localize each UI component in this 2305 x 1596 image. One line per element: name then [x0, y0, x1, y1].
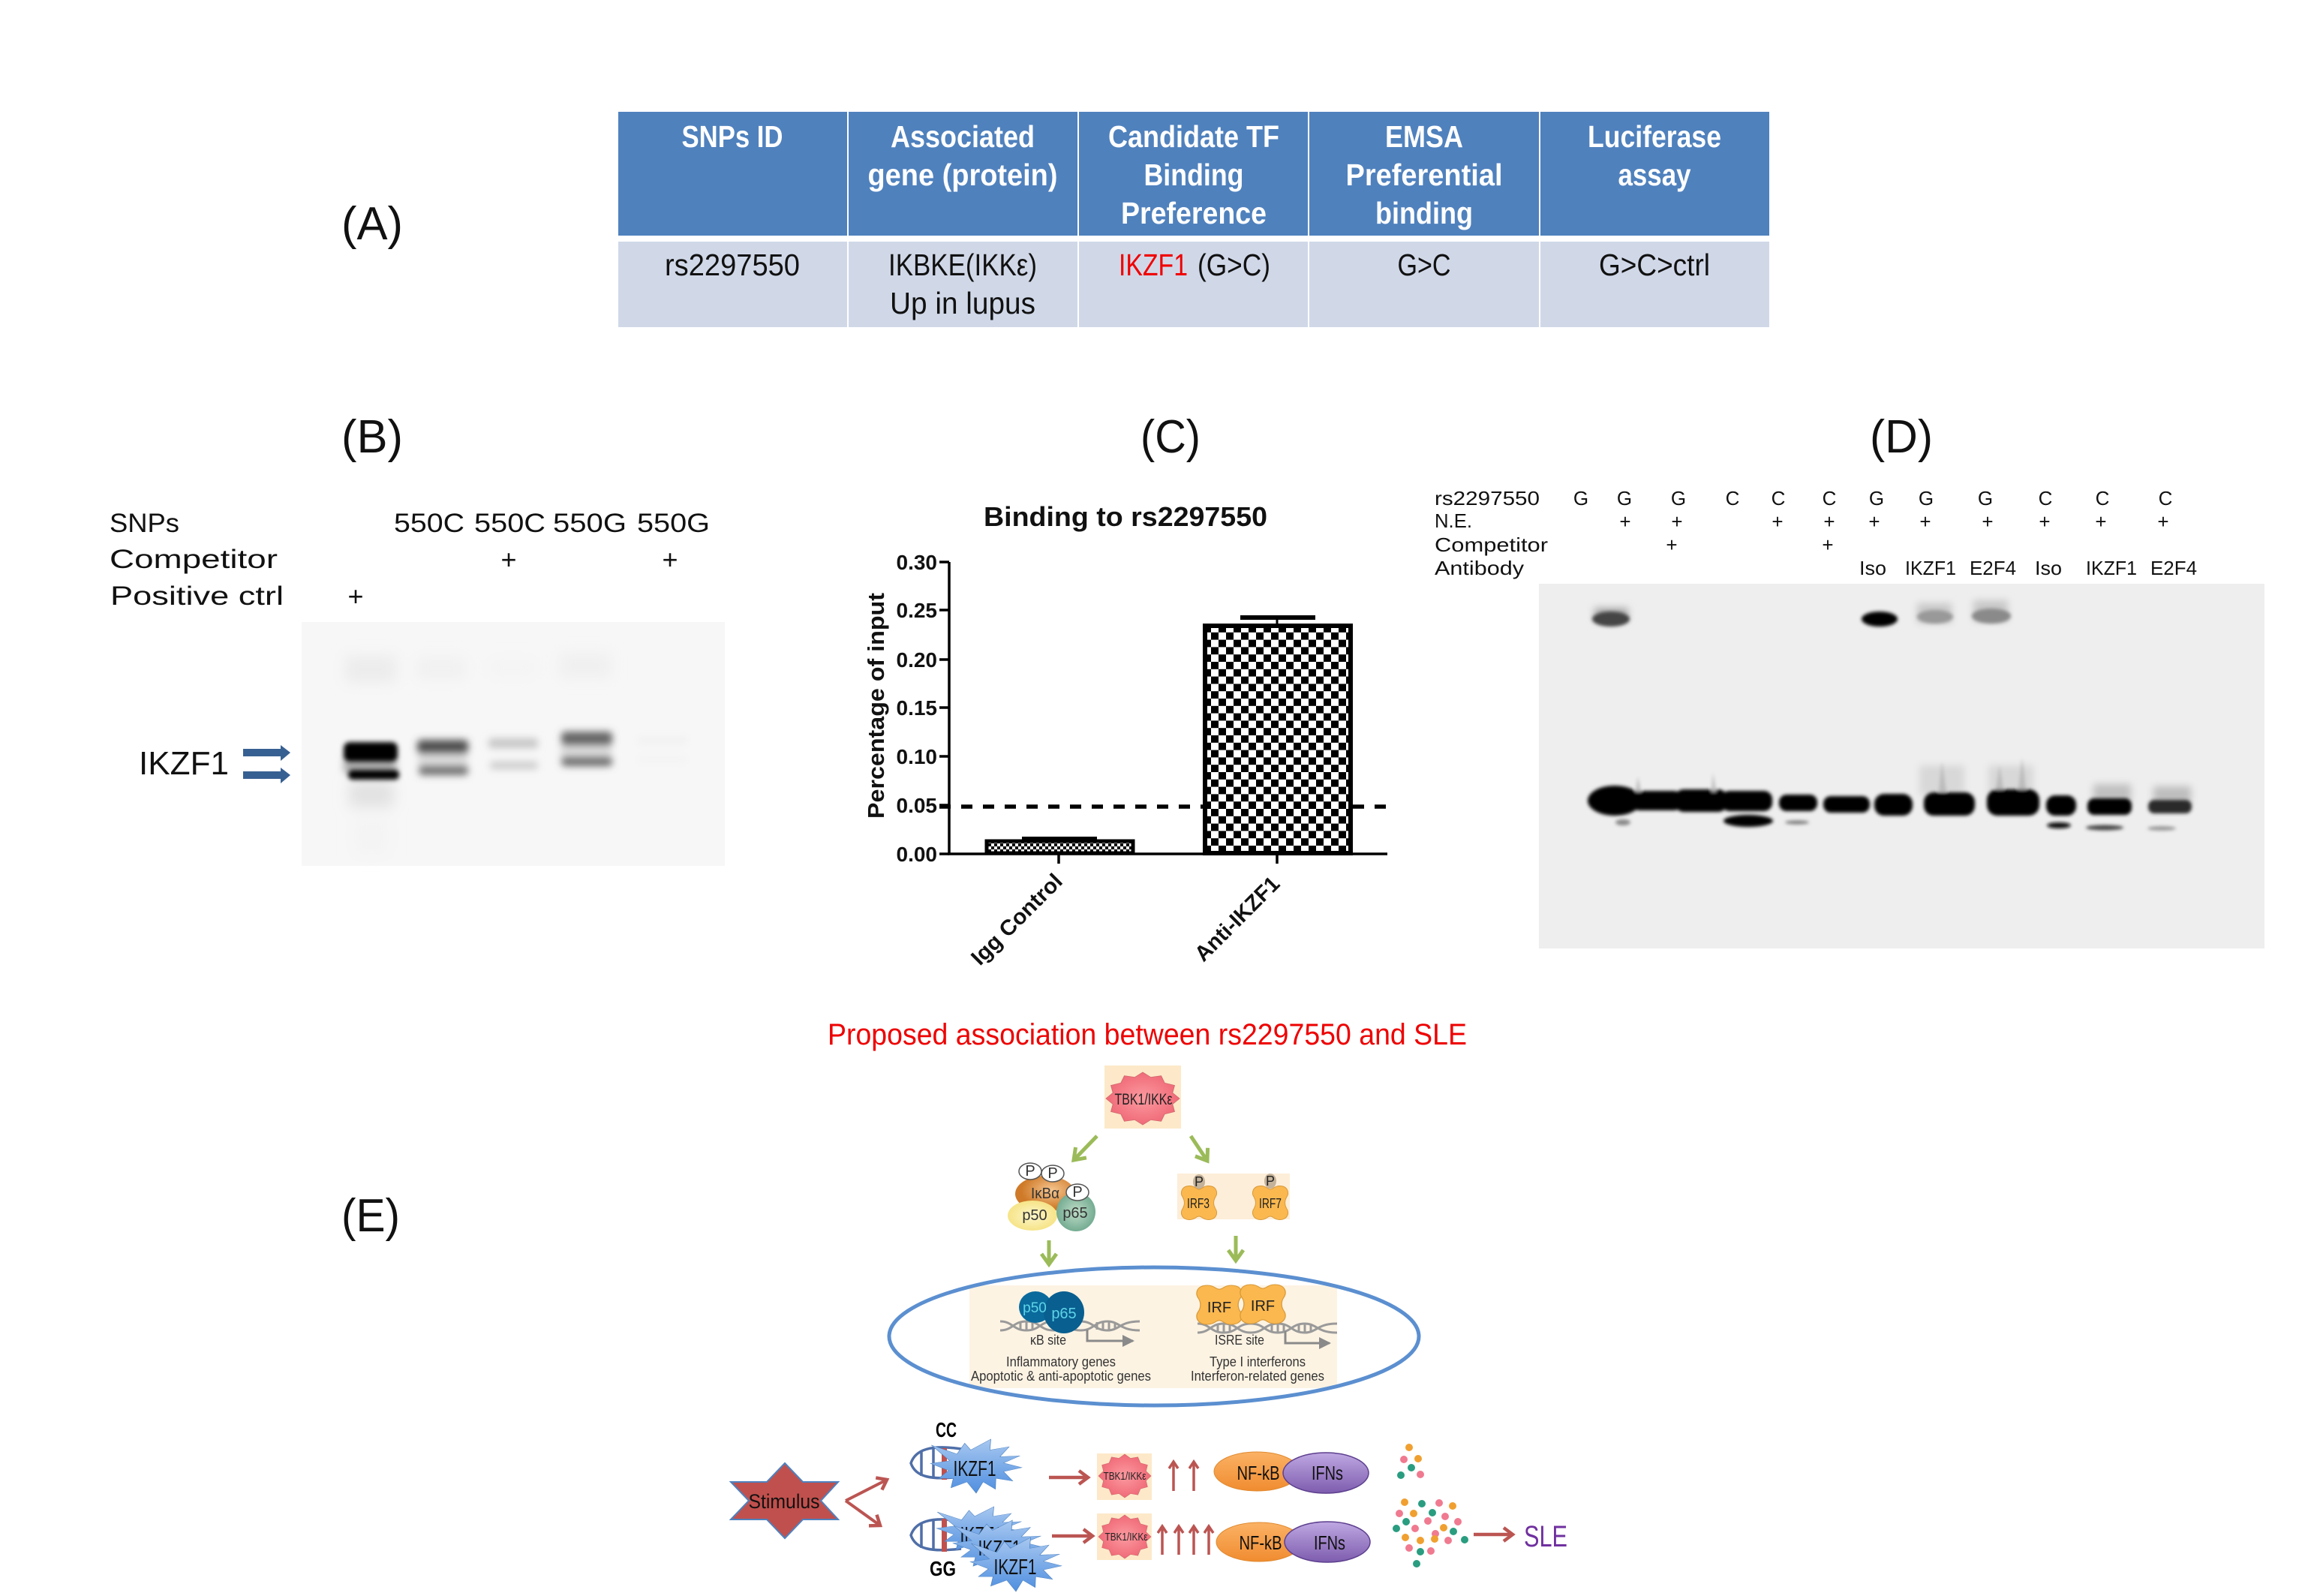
gel lane labels: Iso [2035, 557, 2062, 579]
axes [939, 562, 1387, 864]
phosphorylated IRF3 and IRF7: P [1266, 1174, 1275, 1189]
GG genotype label: GG [930, 1557, 956, 1580]
IκBα p50 p65 complex: P [1047, 1165, 1058, 1182]
blot lane header labels: + [500, 544, 517, 575]
gel lane labels: + [2039, 510, 2051, 533]
gel lane labels: + [1671, 510, 1683, 533]
GG DNA and IKZF1 cluster: IKZF1 [960, 1523, 1002, 1547]
gel lane labels: IKZF1 [1905, 557, 1956, 579]
gel lane labels: + [1868, 510, 1880, 533]
p50 p65 dimer on DNA [1019, 1291, 1084, 1333]
panel label E: (E) [341, 1190, 400, 1242]
gel row headers: Competitor [1435, 534, 1548, 556]
blot lane header labels: + [662, 544, 678, 575]
blot lane header labels: 550G [637, 509, 710, 538]
arrow to SLE [1474, 1533, 1513, 1536]
arrows to TBK1 [1049, 1477, 1092, 1536]
NF-kB and IFNs, GG: IFNs [1314, 1531, 1345, 1554]
gel lane labels: C [1823, 487, 1836, 509]
gel lane labels: E2F4 [2150, 557, 2197, 579]
blot lane header labels: 550C [394, 509, 464, 538]
data text: (G>C) [1198, 248, 1270, 282]
y axis tick labels: 0.25 [896, 599, 937, 622]
gel lane labels: + [2157, 510, 2169, 533]
site and gene labels: κB site [1030, 1333, 1066, 1348]
promoter arrows [1087, 1330, 1330, 1343]
gel lane labels: G [1919, 487, 1934, 509]
GG DNA and IKZF1 cluster: IKZF1 [993, 1555, 1037, 1579]
header text: assay [1618, 158, 1691, 192]
gel lane labels: + [1823, 510, 1835, 533]
y axis tick labels: 0.20 [896, 648, 937, 672]
gel lane labels: + [2095, 510, 2107, 533]
green arrows to IκBα and IRF [1049, 1136, 1236, 1264]
data text: IKBKE(IKKε) [888, 248, 1037, 282]
gel lane labels: C [1726, 487, 1739, 509]
TBK1/IKKε kinase: TBK1/IKKε [1115, 1091, 1172, 1108]
header text: Preference [1121, 196, 1267, 230]
gel lane labels: G [1869, 487, 1884, 509]
gel lane labels: E2F4 [1970, 557, 2016, 579]
table data row [618, 242, 1769, 327]
cytokine dots, CC [1397, 1444, 1424, 1479]
gel lane labels: + [1982, 510, 1994, 533]
gel lane labels: C [1772, 487, 1785, 509]
arrows: IKZF1 bands [243, 745, 290, 783]
data text: G>C>ctrl [1599, 248, 1710, 282]
CC genotype label: CC [936, 1418, 957, 1441]
p50 p65 dimer on DNA: p65 [1051, 1306, 1077, 1322]
phosphorylated IRF3 and IRF7: IRF3 [1187, 1196, 1210, 1211]
header text: binding [1375, 196, 1473, 230]
header text: SNPs ID [681, 119, 783, 154]
blot lane header labels: Positive ctrl [110, 582, 284, 611]
gel image [1539, 584, 2264, 948]
TBK1/IKKε kinase [1104, 1066, 1181, 1129]
blot lane header labels: SNPs [110, 509, 179, 538]
y axis tick labels: 0.00 [896, 843, 937, 866]
site and gene labels: Apoptotic & anti-apoptotic genes [971, 1369, 1151, 1384]
data text: IKZF1 [1119, 248, 1188, 282]
table header row [618, 112, 1769, 236]
panel label C: (C) [1140, 411, 1201, 463]
gel lane labels: G [1671, 487, 1686, 509]
x axis labels [966, 870, 1285, 970]
IκBα p50 p65 complex: P [1025, 1163, 1035, 1180]
blot lane header labels: 550G [553, 509, 627, 538]
NF-kB and IFNs, GG [1216, 1522, 1370, 1562]
site and gene labels: Inflammatory genes [1006, 1354, 1116, 1369]
header text: Luciferase [1588, 119, 1721, 154]
CC DNA and IKZF1 [911, 1439, 1022, 1493]
gel lane labels: G [1573, 487, 1588, 509]
CC DNA and IKZF1: IKZF1 [953, 1457, 996, 1481]
blot lane header labels: Competitor [110, 545, 278, 574]
gel lane labels: C [2096, 487, 2109, 509]
header text: gene (protein) [867, 158, 1058, 192]
gel lane labels: G [1617, 487, 1632, 509]
gel lane labels: IKZF1 [2086, 557, 2137, 579]
panel D: EMSA gel [1435, 487, 2264, 948]
y axis tick labels: 0.15 [896, 696, 937, 720]
DNA strands [1000, 1321, 1337, 1333]
small TBK1/IKKε, CC: TBK1/IKKε [1103, 1470, 1146, 1483]
x axis labels: Igg Control [966, 870, 1068, 970]
IRF dimer on DNA: IRF [1251, 1298, 1275, 1315]
up arrows, CC [1174, 1462, 1194, 1491]
phosphorylated IRF3 and IRF7: P [1195, 1174, 1204, 1189]
label: IKZF1: IKZF1 [139, 745, 229, 782]
header text: Associated [891, 119, 1035, 154]
IκBα p50 p65 complex [1008, 1163, 1095, 1231]
gel lane labels: + [1822, 534, 1834, 556]
site and gene labels: ISRE site [1215, 1333, 1264, 1348]
nucleus oval with transcription [889, 1267, 1419, 1405]
y axis tick labels: 0.30 [896, 551, 937, 574]
small TBK1/IKKε, CC [1097, 1453, 1152, 1500]
panel E: signalling pathway [889, 1066, 1419, 1405]
gel lane labels: + [1619, 510, 1631, 533]
gel lane labels: Iso [1859, 557, 1886, 579]
NF-kB and IFNs, CC [1214, 1452, 1369, 1493]
x axis labels: Anti-IKZF1 [1190, 872, 1285, 966]
y axis tick labels [896, 551, 937, 866]
NF-kB and IFNs, GG: NF-kB [1240, 1531, 1282, 1554]
data text [665, 248, 1710, 320]
data text: rs2297550 [665, 248, 800, 282]
blot lane header labels: + [347, 581, 364, 612]
small TBK1/IKKε, GG [1097, 1513, 1152, 1560]
header text: Binding [1143, 158, 1244, 192]
up arrows, GG [1162, 1526, 1209, 1555]
panel label B: (B) [341, 411, 403, 463]
gel lane labels: + [1919, 510, 1931, 533]
bar: Anti-IKZF1 [1205, 618, 1351, 853]
y axis tick labels: 0.05 [896, 794, 937, 817]
stimulus star: Stimulus [749, 1490, 819, 1513]
gel lane labels: C [2039, 487, 2052, 509]
phosphorylated IRF3 and IRF7 [1177, 1174, 1290, 1220]
phosphorylated IRF3 and IRF7: IRF7 [1259, 1196, 1282, 1211]
GG DNA and IKZF1 cluster: IKZF1 [978, 1537, 1020, 1561]
IRF dimer on DNA [1197, 1285, 1285, 1324]
IκBα p50 p65 complex: P [1072, 1184, 1083, 1201]
IRF dimer on DNA: IRF [1207, 1300, 1231, 1316]
panel B: western blot [110, 509, 725, 866]
panel label D: (D) [1870, 411, 1933, 463]
gel row headers: N.E. [1435, 509, 1472, 532]
bar: Igg control [987, 839, 1133, 853]
header text: EMSA [1385, 119, 1463, 154]
IκBα p50 p65 complex: IκBα [1031, 1186, 1059, 1202]
gel lane labels: C [2159, 487, 2172, 509]
NF-kB and IFNs, CC: NF-kB [1237, 1462, 1280, 1484]
blot lane header labels [110, 509, 710, 612]
GG DNA and IKZF1 cluster [911, 1507, 1062, 1591]
panel E heading: Proposed association between rs2297550 and SLE [828, 1018, 1467, 1051]
header text [681, 119, 1721, 230]
blot image [302, 622, 725, 866]
threshold dashed line [939, 804, 1388, 809]
site and gene labels: Type I interferons [1210, 1354, 1306, 1369]
header text: Candidate TF [1108, 119, 1279, 154]
panel E: genotype model [731, 1418, 1567, 1591]
IκBα p50 p65 complex: p50 [1022, 1207, 1047, 1224]
gel row headers [1435, 487, 1548, 579]
y axis title: Percentage of input [863, 593, 889, 819]
NF-kB and IFNs, CC: IFNs [1312, 1462, 1343, 1484]
data text: Up in lupus [890, 286, 1035, 320]
panel C: bar chart [863, 501, 1388, 970]
small TBK1/IKKε, GG: TBK1/IKKε [1104, 1531, 1148, 1543]
IκBα p50 p65 complex: p65 [1062, 1205, 1088, 1222]
gel row headers: Antibody [1435, 557, 1524, 579]
SLE label: SLE [1524, 1520, 1567, 1553]
cytokine dots, GG [1393, 1498, 1468, 1567]
branching arrows [846, 1480, 887, 1525]
data text: G>C [1397, 248, 1451, 282]
panel A: SNP summary table [618, 112, 1769, 327]
p50 p65 dimer on DNA: p50 [1023, 1300, 1047, 1316]
gel lane labels [1573, 487, 2197, 579]
site and gene labels [971, 1333, 1324, 1384]
site and gene labels: Interferon-related genes [1191, 1369, 1324, 1384]
gel lane labels: G [1978, 487, 1993, 509]
chart title: Binding to rs2297550 [984, 501, 1267, 532]
panel label A: (A) [341, 198, 403, 250]
gel lane labels: + [1772, 510, 1784, 533]
gel row headers: rs2297550 [1435, 487, 1540, 509]
gel lane labels: + [1666, 534, 1678, 556]
blot lane header labels: 550C [474, 509, 545, 538]
header text: Preferential [1346, 158, 1502, 192]
y axis tick labels: 0.10 [896, 745, 937, 768]
stimulus star [731, 1463, 838, 1538]
